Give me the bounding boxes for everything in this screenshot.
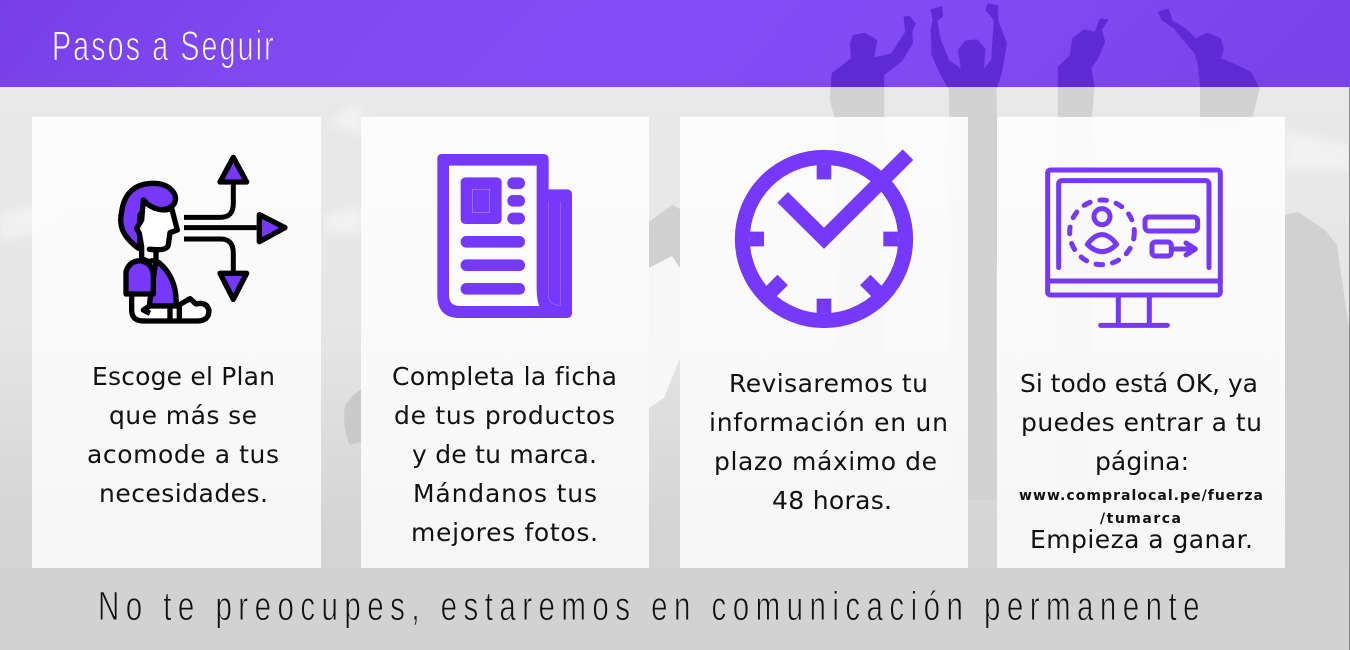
text block: step 4: www.compralocal.pe/fuerza (1019, 488, 1263, 504)
text block: step 2: Completa la ficha (392, 362, 617, 391)
text block: step 3 (709, 369, 948, 515)
panel: step 3 (680, 117, 968, 568)
text block: step 2: de tus productos (394, 401, 615, 430)
panel: step 2 (361, 117, 649, 568)
text block: step 2: mejores fotos. (411, 518, 598, 547)
text block: step 2: Mándanos tus (413, 479, 597, 508)
text block: step 3: información en un (709, 408, 948, 437)
text block: step 3: 48 horas. (772, 486, 892, 515)
panel: step 4 (997, 117, 1285, 568)
footer message: No te preocupes, estaremos en comunicación permanente (98, 583, 1200, 629)
text block: step 4: puedes entrar a tu (1021, 408, 1262, 437)
header band (0, 0, 1350, 87)
text block: step 2 (392, 362, 617, 547)
text block: step 1: que más se (109, 401, 257, 430)
text block: step 1 (87, 362, 279, 508)
text block: step 4: página: (1095, 447, 1189, 476)
text block: step 1: Escoge el Plan (92, 362, 275, 391)
text block: step 4 (1019, 369, 1263, 554)
panel: step 1 (32, 117, 321, 568)
icon: clock with check mark (742, 155, 908, 321)
icon: monitor with profile (1048, 170, 1220, 325)
title: Pasos a Seguir (52, 21, 274, 69)
text block: step 4: /tumarca (1100, 511, 1181, 527)
icon: person choosing between arrows (121, 157, 285, 321)
text block: step 4: Empieza a ganar. (1030, 525, 1253, 554)
icon: newspaper (437, 154, 572, 318)
text block: step 2: y de tu marca. (412, 440, 597, 469)
text block: step 3: Revisaremos tu (729, 369, 928, 398)
text block: step 4: Si todo está OK, ya (1020, 369, 1258, 398)
text block: step 3: plazo máximo de (714, 447, 937, 476)
text block: step 1: necesidades. (99, 479, 268, 508)
text block: step 1: acomode a tus (87, 440, 279, 469)
silhouettes of celebrating people (830, 3, 1260, 500)
